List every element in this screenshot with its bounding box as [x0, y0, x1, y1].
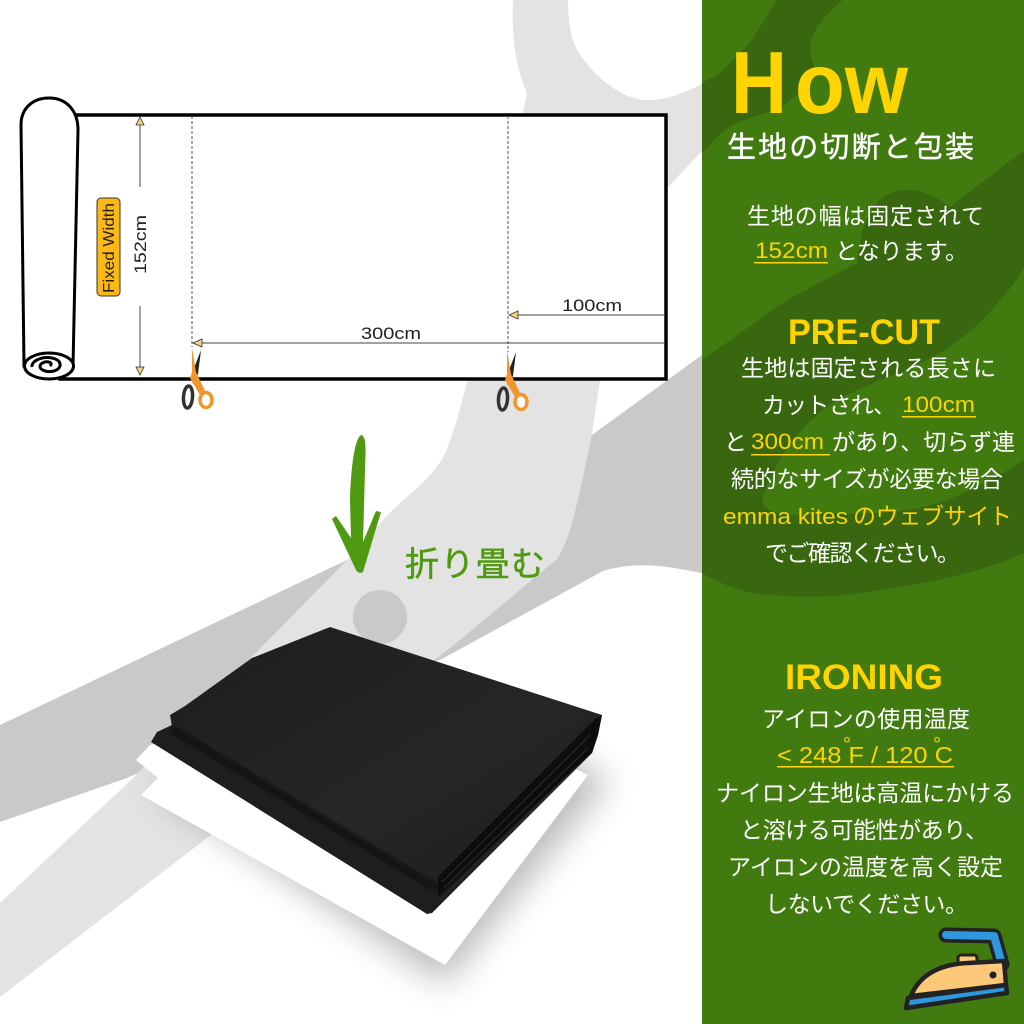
- intro text: 152cm: [755, 238, 828, 263]
- heading PRE-CUT: PRE-CUT: [788, 313, 940, 352]
- icon: scissors left: [183, 348, 212, 408]
- intro text: [747, 203, 984, 264]
- pre-cut text: があり、切らず連: [832, 429, 1015, 455]
- panel: right green: [702, 0, 1024, 1024]
- title How: ow: [795, 37, 909, 132]
- pre-cut text: emma kites: [723, 504, 848, 529]
- ironing text: アイロンの温度を高く設定: [728, 854, 1003, 880]
- dimension arrow 152cm: [136, 117, 144, 375]
- ironing text: と溶ける可能性があり、: [740, 817, 988, 843]
- ironing text: °: [933, 734, 941, 756]
- sheet shadow: [150, 720, 610, 985]
- ironing text: ナイロン生地は高温にかける: [716, 780, 1014, 806]
- crease between layers: [172, 729, 435, 887]
- cut line right: [507, 116, 509, 352]
- icon: scissors right: [498, 350, 527, 410]
- fabric roll diagram: [21, 98, 666, 410]
- fabric roll: [21, 98, 78, 379]
- ironing text: °: [843, 734, 851, 756]
- pre-cut text: でご確認ください。: [765, 540, 960, 566]
- pre-cut text: 300cm: [751, 429, 824, 454]
- pre-cut text: カットされ、: [762, 392, 896, 418]
- lower fabric layer: [151, 715, 602, 914]
- ironing text: アイロンの使用温度: [762, 706, 970, 732]
- background: scissors silhouette: [0, 0, 702, 997]
- title How: [731, 33, 909, 132]
- subtitle: 生地の切断と包装: [727, 131, 974, 164]
- title How: H: [731, 33, 787, 132]
- badge fixed width: [97, 198, 120, 296]
- pre-cut text: 100cm: [902, 392, 975, 417]
- pre-cut text: 生地は固定される長さに: [741, 355, 996, 381]
- intro text: 生地の幅は固定されて: [747, 203, 984, 229]
- ironing text: < 248 F / 120 C: [777, 742, 953, 768]
- heading IRONING: IRONING: [785, 658, 943, 697]
- icon: iron: [906, 935, 1007, 1008]
- pre-cut text: [723, 355, 1015, 566]
- white sheet: [136, 680, 588, 965]
- panel background: [702, 0, 1024, 1024]
- intro text: となります。: [835, 238, 968, 264]
- panel darker scissors shapes: [702, 0, 843, 153]
- ironing text: [716, 706, 1014, 917]
- dimension arrow 300cm: [193, 339, 665, 347]
- dimension arrow 100cm: [509, 311, 665, 319]
- arrow: fold down: [332, 435, 381, 573]
- badge fixed width: Fixed Width: [101, 203, 118, 293]
- cut line left: [191, 116, 193, 347]
- pre-cut text: と: [724, 429, 747, 455]
- label: fold: 折り畳む: [405, 546, 545, 584]
- upper fabric layer: [170, 627, 602, 885]
- pre-cut text: のウェブサイト: [853, 503, 1012, 529]
- label 152cm: 152cm: [131, 215, 150, 274]
- pre-cut text: 続的なサイズが必要な場合: [731, 466, 1003, 492]
- fabric sheet outline: [60, 115, 666, 379]
- folded black fabric: [136, 627, 610, 985]
- ironing text: しないでください。: [765, 891, 968, 917]
- label 100cm: 100cm: [562, 296, 622, 315]
- fabric side folds: [438, 715, 602, 900]
- label 300cm: 300cm: [361, 324, 421, 343]
